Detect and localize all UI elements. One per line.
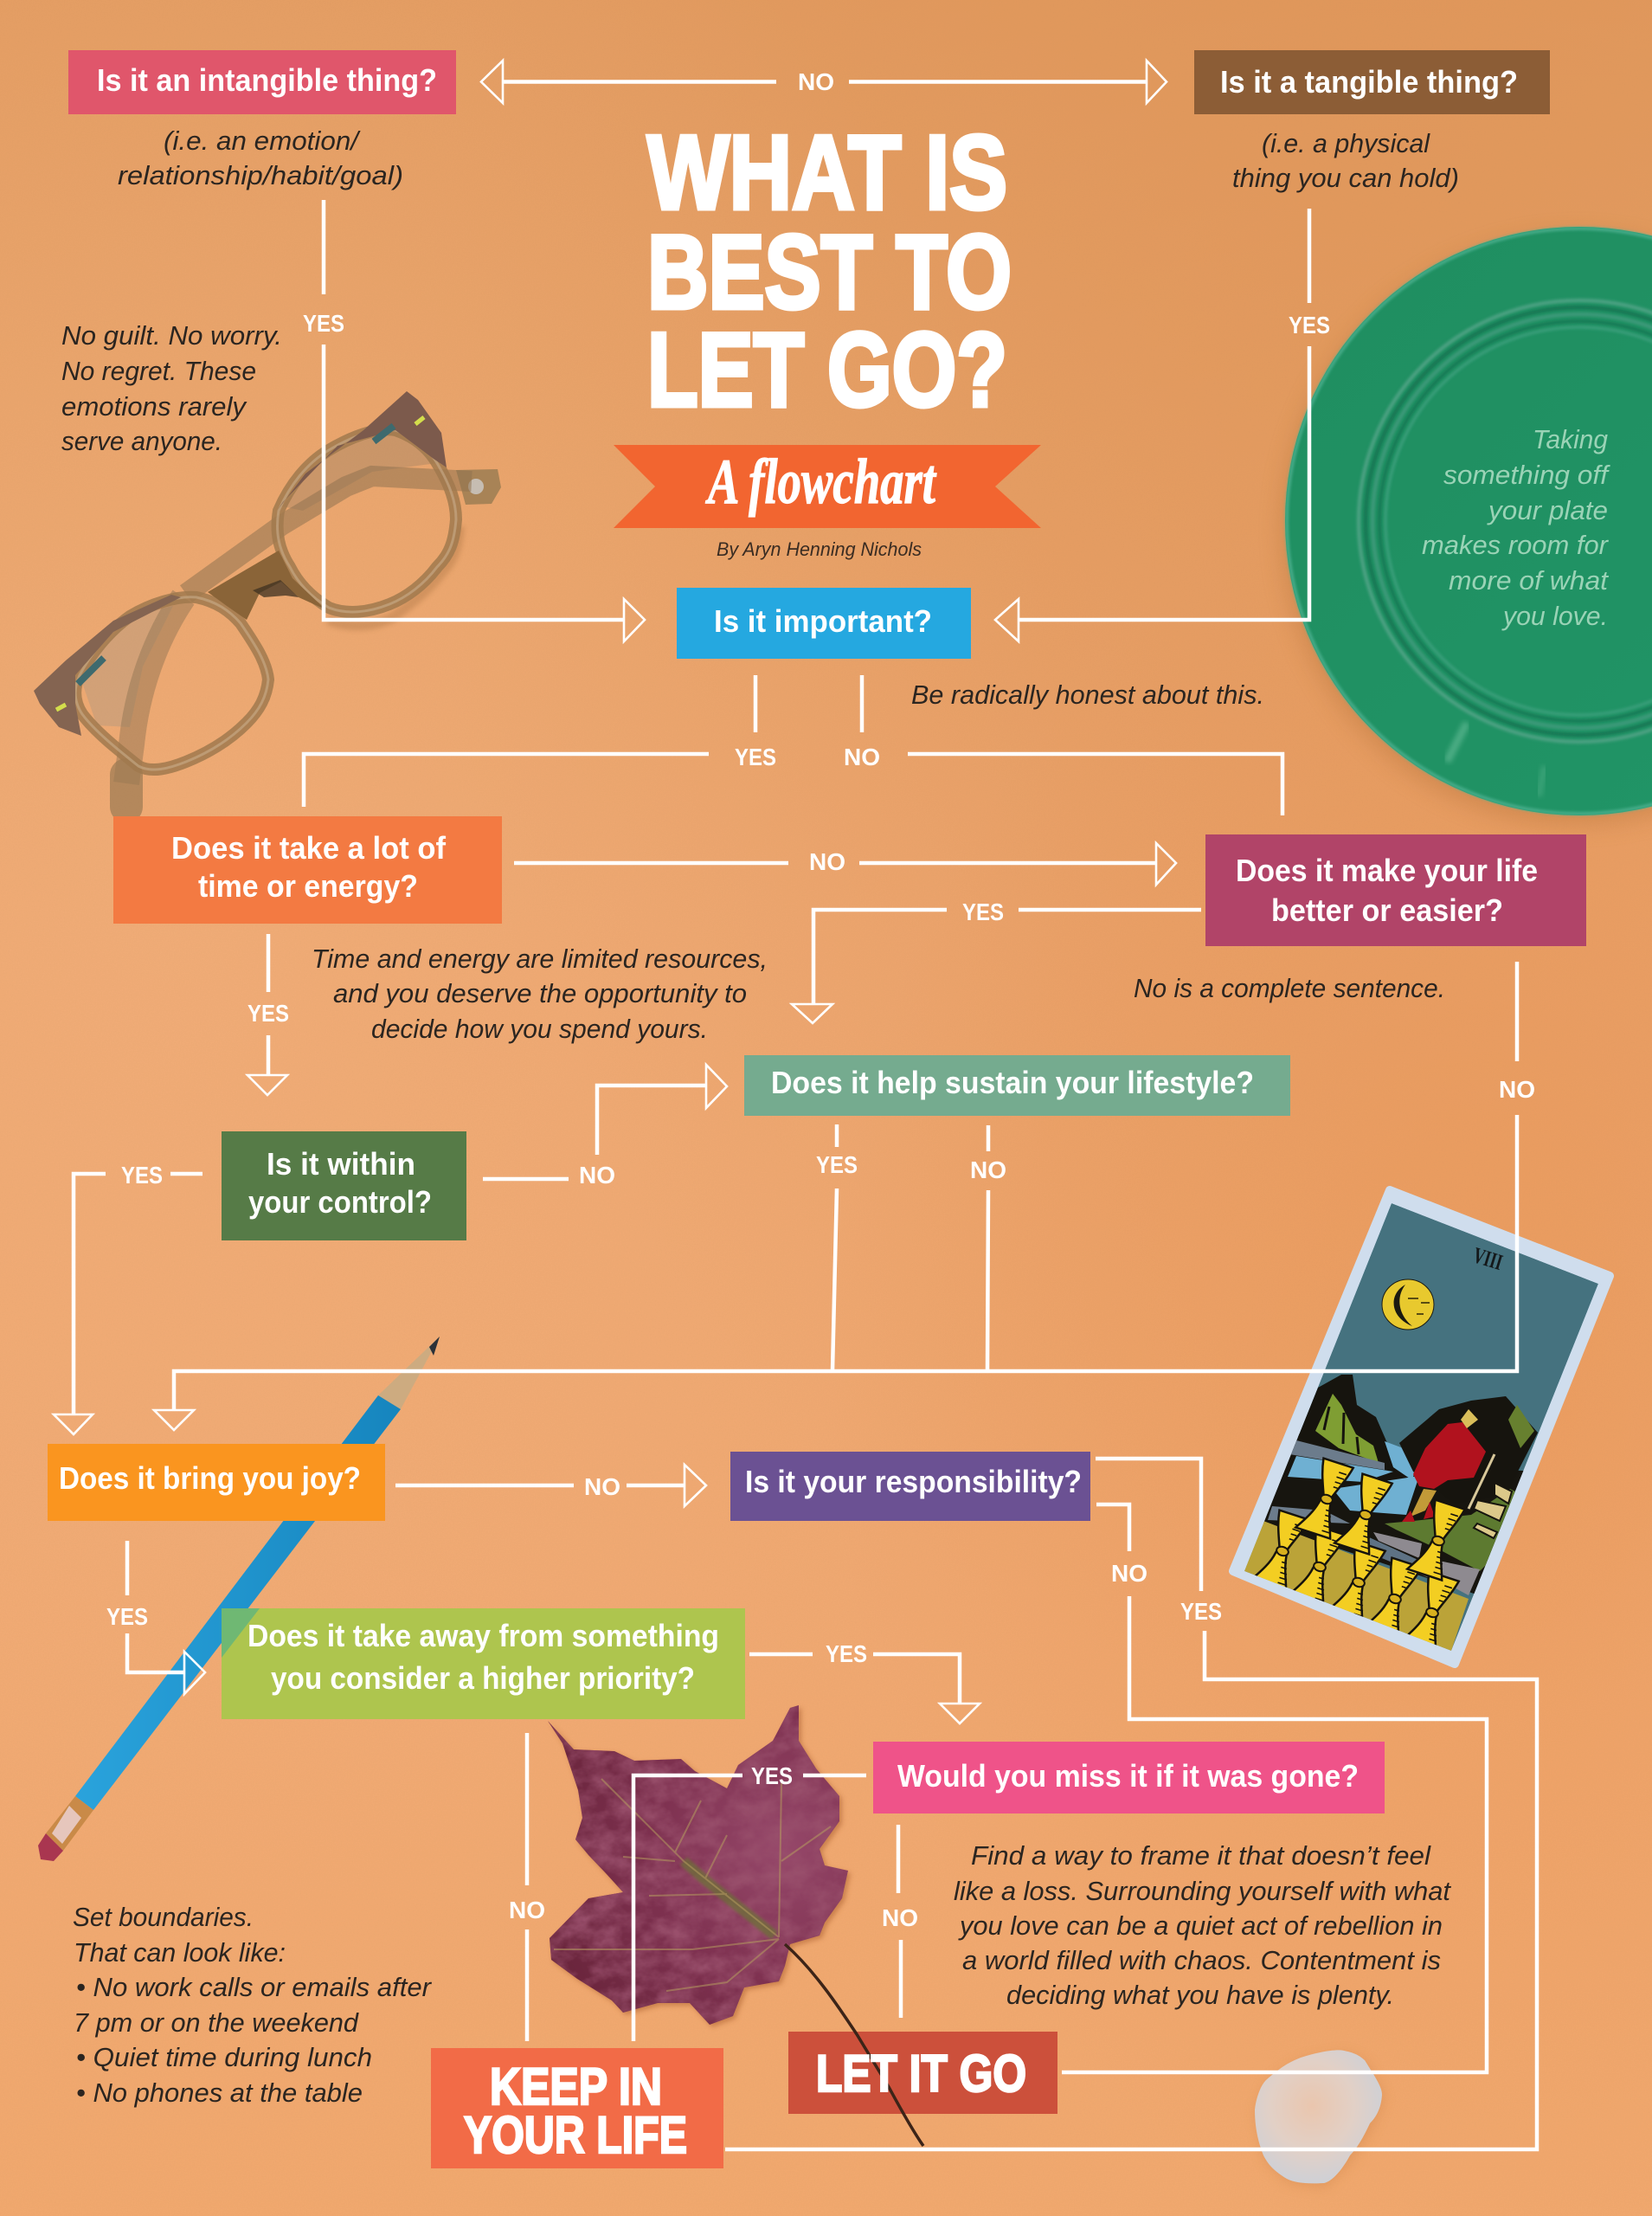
box: is it important (677, 588, 971, 659)
pencil wood tip (378, 1337, 440, 1409)
roman numeral: VIII (1470, 1242, 1506, 1275)
photo: green plate (1282, 227, 1652, 824)
photo: tarot card (1233, 1190, 1610, 1664)
note: set boundaries (73, 1902, 433, 2108)
note: tangible examples (1232, 128, 1459, 193)
right glitter brow (277, 391, 447, 511)
legs and boots (1411, 1489, 1437, 1517)
moon (1382, 1279, 1434, 1330)
question text: life better: Does it make your life (1236, 853, 1538, 888)
note: no guilt: emotions rarely (61, 391, 248, 422)
connector: tangible YES to important (995, 209, 1330, 641)
connector: life better YES to sustain (792, 899, 1201, 1023)
note: taking something off your plate: you love. (1501, 601, 1608, 631)
question text: within control: Is it within (267, 1146, 415, 1182)
connector: miss it NO to let go (882, 1825, 918, 2018)
temple arm long (186, 476, 472, 594)
grey stones (1373, 1532, 1480, 1595)
question text: sustain lifestyle: Does it help sustain your lifestyle? (771, 1065, 1254, 1100)
question text: time or energy (171, 830, 447, 904)
box: within control (222, 1131, 466, 1240)
connector: joy NO to responsibility (395, 1465, 706, 1506)
note: taking something off your plate: something off (1443, 460, 1610, 490)
title: LET GO? (647, 311, 1007, 428)
red cloak figure (1413, 1422, 1486, 1489)
title (647, 113, 1012, 428)
connector: life better NO to joy: NO (1499, 1076, 1535, 1103)
connector: priority YES to miss it: YES (826, 1640, 867, 1667)
note: no is a complete sentence: No is a complete sentence. (1134, 973, 1445, 1003)
photo: maple leaf (548, 1705, 851, 2027)
eraser (38, 1833, 63, 1861)
box: let it go (788, 2032, 1057, 2114)
note: frame it: deciding what you have is plenty. (1006, 1980, 1394, 2010)
card base (1233, 1190, 1610, 1664)
note: tangible examples: (i.e. a physical (1262, 128, 1430, 158)
question text: tangible: Is it a tangible thing? (1220, 64, 1518, 100)
leaf veins (554, 1779, 831, 1991)
connector: miss it YES to keep: YES (751, 1762, 793, 1789)
note: intangible examples (118, 126, 403, 190)
connector: within control YES to joy (54, 1162, 202, 1434)
note: set boundaries: That can look like: (74, 1937, 286, 1968)
outcome text: let it go: LET IT GO (816, 2045, 1026, 2103)
note: set boundaries: 7 pm or on the weekend (74, 2007, 360, 2038)
connector: intangible to tangible NO: NO (798, 68, 834, 95)
question text: miss it: Would you miss it if it was gone? (897, 1758, 1359, 1794)
connector: time or energy NO to life better (514, 843, 1176, 885)
leaf stem (785, 1944, 923, 2146)
box: sustain lifestyle (744, 1055, 1290, 1116)
note: taking something off your plate (1422, 424, 1610, 631)
note: time and energy: and you deserve the opportunity to (333, 978, 747, 1008)
card art (1244, 1203, 1598, 1652)
connector: important YES to time or energy (304, 675, 776, 807)
note: time and energy (312, 944, 768, 1044)
note: set boundaries: • No work calls or emails after (76, 1972, 433, 2002)
title: WHAT IS (647, 113, 1007, 231)
outcome text: keep in your life (464, 2058, 687, 2164)
note: frame it: like a loss. Surrounding yourself with what (954, 1876, 1451, 1906)
note: taking something off your plate: Taking (1533, 424, 1608, 454)
question text: higher priority (247, 1618, 719, 1696)
question text: responsibility: Is it your responsibility? (745, 1464, 1082, 1499)
box: responsibility (730, 1452, 1090, 1521)
photo: blue pencil (38, 1337, 440, 1861)
note: taking something off your plate: more of what (1449, 565, 1609, 596)
note: no guilt (61, 320, 282, 456)
note: set boundaries: Set boundaries. (73, 1902, 254, 1932)
note: frame it: you love can be a quiet act of rebellion in (958, 1910, 1443, 1941)
river (1288, 1441, 1419, 1515)
left glitter brow (34, 595, 181, 736)
photo: white quartz stone (1255, 2050, 1384, 2187)
connector: time or energy YES to within control: YES (247, 1000, 289, 1027)
connector: within control NO to sustain (483, 1065, 727, 1189)
question text: life better (1236, 853, 1538, 928)
note: frame it (954, 1840, 1451, 2010)
question text: within control (248, 1146, 432, 1220)
connector: important NO to life better: NO (844, 744, 880, 770)
question text: life better: better or easier? (1271, 892, 1503, 928)
box: miss it (873, 1742, 1385, 1813)
question text: higher priority: you consider a higher priority? (271, 1660, 695, 1696)
connector: joy NO to responsibility: NO (584, 1473, 620, 1500)
dark landscape base (1263, 1433, 1523, 1594)
left hill (1298, 1375, 1391, 1459)
box: bring joy (48, 1444, 385, 1521)
rocks (1474, 1483, 1512, 1538)
note: intangible examples: (i.e. an emotion/ (164, 126, 361, 156)
subtitle: a flowchart: A flowchart (705, 447, 937, 518)
connector: priority NO to keep: NO (509, 1897, 545, 1923)
box: life better (1205, 834, 1586, 946)
note: frame it: Find a way to frame it that doesn’t feel (971, 1840, 1431, 1871)
note: radically honest: Be radically honest about this. (911, 680, 1264, 710)
connector: miss it NO to let go: NO (882, 1904, 918, 1931)
box: keep in your life (431, 2048, 723, 2168)
connector: time or energy NO to life better: NO (809, 848, 845, 875)
staff (1469, 1454, 1495, 1509)
lens tints (80, 430, 437, 727)
ground (1385, 1489, 1527, 1571)
connector: sustain YES to joy line (816, 1124, 858, 1370)
connector: sustain YES to joy line: YES (816, 1151, 858, 1178)
connector: joy YES to priority (106, 1541, 205, 1694)
connector: sustain NO to joy line: NO (970, 1156, 1006, 1183)
connector: within control NO to sustain: NO (579, 1162, 615, 1189)
photo: eyeglasses (34, 391, 501, 807)
connector: responsibility NO to let go (1062, 1504, 1487, 2072)
outcome text: keep in your life: YOUR LIFE (464, 2106, 687, 2164)
connector: miss it YES to keep (633, 1762, 866, 2041)
note: set boundaries: • Quiet time during lunch (76, 2042, 372, 2072)
connector: life better YES to sustain: YES (962, 899, 1004, 925)
box: intangible (68, 50, 456, 114)
connector: intangible to tangible NO (481, 61, 1167, 103)
connector: within control YES to joy: YES (121, 1162, 163, 1189)
note: frame it: a world filled with chaos. Contentment is (962, 1945, 1441, 1975)
box: higher priority (222, 1608, 745, 1719)
connector: responsibility YES to keep: YES (1180, 1598, 1222, 1625)
connector: important NO to life better (844, 675, 1282, 815)
connector: responsibility YES to keep (725, 1459, 1537, 2149)
note: no guilt: No regret. These (61, 356, 256, 386)
question text: within control: your control? (248, 1184, 432, 1220)
note: set boundaries: • No phones at the table (76, 2078, 363, 2108)
question text: time or energy: Does it take a lot of (171, 830, 447, 866)
note: no guilt: No guilt. No worry. (61, 320, 282, 351)
temple arm short (126, 597, 183, 783)
nose bridge (208, 551, 325, 620)
byline: By Aryn Henning Nichols (717, 538, 922, 560)
connector: joy YES to priority: YES (106, 1603, 148, 1630)
card sky (1244, 1203, 1598, 1651)
temple arm tab (456, 469, 501, 505)
question text: bring joy: Does it bring you joy? (59, 1460, 361, 1496)
note: time and energy: Time and energy are limited resources, (312, 944, 768, 974)
left lens rim (75, 597, 268, 770)
question text: intangible: Is it an intangible thing? (97, 62, 437, 98)
note: tangible examples: thing you can hold) (1232, 163, 1459, 193)
goblets (1251, 1457, 1465, 1652)
right hill (1399, 1396, 1538, 1472)
question text: important: Is it important? (714, 603, 932, 639)
connector: responsibility NO to let go: NO (1111, 1560, 1147, 1587)
connector: priority YES to miss it (749, 1640, 980, 1723)
note: time and energy: decide how you spend yours. (371, 1014, 708, 1044)
connector: time or energy YES to within control (247, 934, 289, 1095)
leaf midrib (684, 1861, 775, 1936)
connector: tangible YES to important: YES (1289, 312, 1330, 338)
note: taking something off your plate: makes room for (1422, 530, 1610, 560)
gold foreground (1244, 1521, 1469, 1651)
note: intangible examples: relationship/habit/goal) (118, 160, 403, 190)
banner: a flowchart ribbon (614, 445, 1041, 528)
note: no guilt: serve anyone. (61, 426, 222, 456)
question text: time or energy: time or energy? (198, 868, 418, 904)
right lens rim (278, 429, 456, 612)
connector: life better NO to joy (154, 962, 1535, 1430)
question text: higher priority: Does it take away from something (247, 1618, 719, 1653)
connector: intangible YES to important (303, 200, 645, 641)
note: taking something off your plate: your plate (1487, 495, 1608, 525)
connector: intangible YES to important: YES (303, 310, 344, 337)
ferrule (46, 1796, 93, 1851)
outcome text: keep in your life: KEEP IN (490, 2058, 662, 2116)
hinges (56, 417, 424, 710)
pencil body (75, 1395, 401, 1810)
box: tangible (1194, 50, 1550, 114)
pencil showing through priority box (222, 1608, 260, 1658)
title: BEST TO (647, 213, 1012, 331)
box: time or energy (113, 816, 502, 924)
connector: important YES to time or energy: YES (735, 744, 776, 770)
